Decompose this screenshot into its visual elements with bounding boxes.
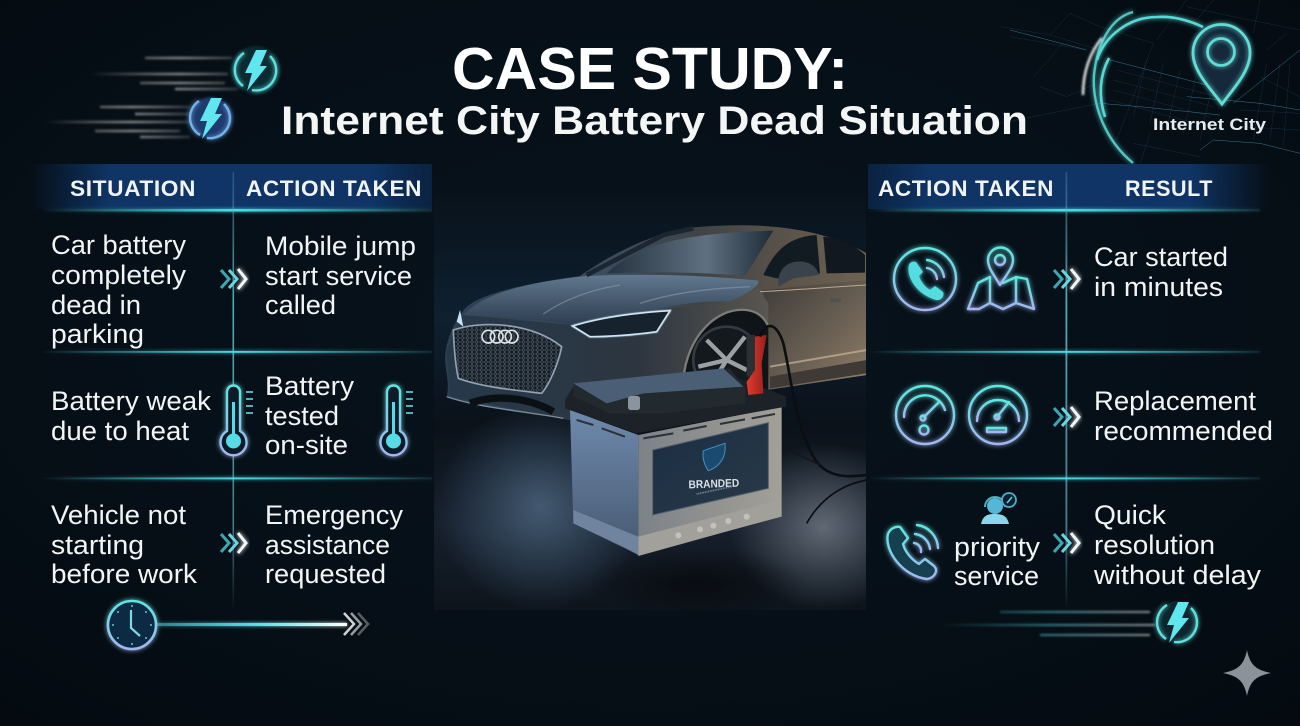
icon: phone in circle: [894, 248, 956, 310]
row 3 arrow: [1054, 533, 1079, 553]
row 1 arrow: [1054, 269, 1079, 289]
row 1 situation text: completely: [51, 260, 187, 290]
row 2 result text: Replacement: [1094, 386, 1257, 416]
row 1 result text: Car started: [1094, 242, 1228, 272]
left table header: ACTION TAKEN: [246, 176, 422, 201]
wheel: [683, 310, 768, 390]
icon: thermometer: [380, 386, 413, 455]
right table header: [868, 164, 1270, 209]
priority service label: priority: [954, 532, 1041, 562]
icon: phone: [887, 525, 938, 579]
white arc: [1083, 38, 1102, 95]
icon: gauge: [896, 386, 954, 444]
row 1 action text: start service: [265, 261, 412, 291]
row 3 situation text: before work: [51, 559, 198, 589]
battery: [565, 368, 786, 556]
right table header: RESULT: [1125, 176, 1213, 201]
title: [281, 36, 1028, 143]
row 1 arrow: [221, 269, 246, 289]
icon: thermometer: [220, 386, 253, 455]
row 2 action text: Battery: [265, 371, 355, 401]
row 3 situation text: Vehicle not: [51, 500, 186, 530]
floor reflection: [434, 403, 917, 620]
row 1 action text: called: [265, 290, 336, 320]
row 2 situation text: due to heat: [51, 416, 190, 446]
car body: [445, 225, 867, 420]
row 3 action text: assistance: [265, 530, 390, 560]
row 2 result text: recommended: [1094, 416, 1273, 446]
location pin: [1193, 25, 1250, 104]
row 3 situation text: starting: [51, 530, 144, 560]
battery: BRANDED: [688, 478, 739, 491]
row 2 situation text: Battery weak: [51, 386, 212, 416]
row 3 result text: Quick: [1094, 500, 1167, 530]
speed icon: lightning bolt bottom right: [940, 601, 1199, 643]
icon: agent headset: [981, 493, 1016, 524]
city ring: [1094, 12, 1203, 163]
grille: [453, 325, 562, 393]
row 3 result text: without delay: [1093, 560, 1262, 590]
row 1 situation text: dead in: [51, 290, 141, 320]
title: CASE STUDY:: [452, 36, 848, 102]
right table header: ACTION TAKEN: [878, 176, 1054, 201]
row 1 situation text: parking: [51, 319, 144, 349]
car and battery image: [434, 193, 917, 620]
row 3 action text: Emergency: [265, 500, 403, 530]
left table header: SITUATION: [70, 176, 196, 201]
row 1 result text: in minutes: [1094, 272, 1223, 302]
row 3 result text: resolution: [1094, 530, 1215, 560]
map: Internet City: [1000, 0, 1300, 163]
icon: sparkle star: [1223, 650, 1271, 696]
map label: Internet City: [1153, 116, 1267, 134]
icon: speedometer: [969, 386, 1027, 444]
panel: left table: [30, 164, 432, 612]
map streets: [1000, 0, 1300, 163]
row 2 action text: on-site: [265, 430, 348, 460]
panel: right table: [868, 164, 1273, 612]
row 3 arrow: [221, 533, 246, 553]
row 2 arrow: [1054, 407, 1079, 427]
row 3 action text: requested: [265, 559, 386, 589]
icon: folded map with pin: [968, 247, 1034, 309]
row 2 action text: tested: [265, 401, 339, 431]
priority service label: service: [954, 561, 1039, 591]
jumper clamp and cable: [747, 326, 867, 523]
row 1 action text: Mobile jump: [265, 231, 416, 261]
row 1 situation text: Car battery: [51, 230, 186, 260]
title: Internet City Battery Dead Situation: [281, 99, 1028, 143]
icon: clock with timeline arrow: [108, 601, 368, 649]
speed icon: lightning bolts top left: [45, 46, 280, 139]
left table header: [30, 164, 432, 209]
headlight: [573, 311, 670, 337]
